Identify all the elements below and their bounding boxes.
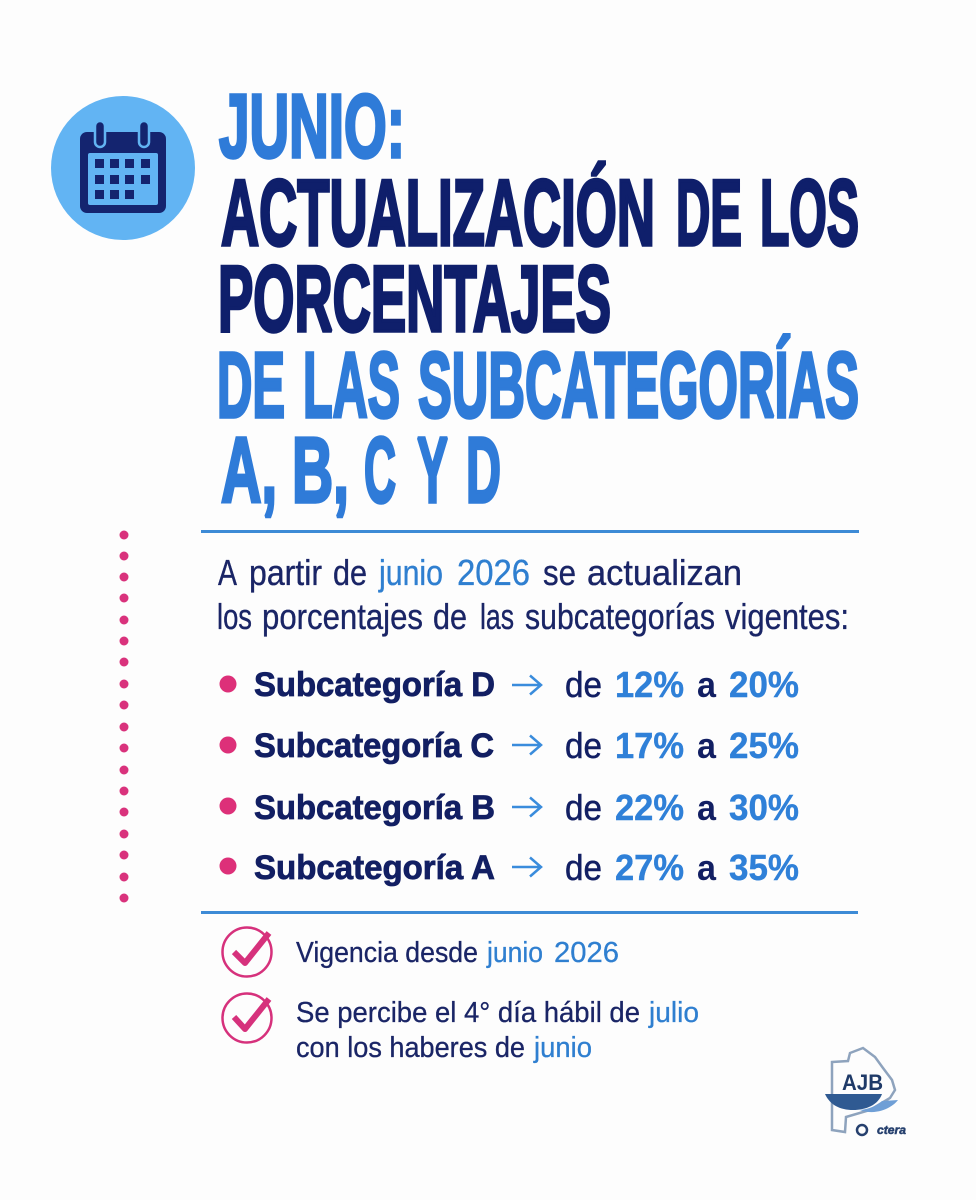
list row: subcategoría D: [220, 664, 799, 705]
list row: subcategoría B: a: [697, 787, 717, 828]
intro text: los: [217, 596, 252, 637]
logo: AJB: AJB: [842, 1070, 883, 1095]
list row: subcategoría B: 22%: [615, 787, 684, 828]
dotted vertical line: [120, 530, 128, 902]
intro text: vigentes:: [725, 596, 849, 637]
intro text: [217, 552, 849, 637]
intro text: de: [433, 596, 467, 637]
list row: subcategoría C: 25%: [729, 725, 799, 766]
intro text: actualizan: [587, 552, 742, 593]
list row: subcategoría C: de: [565, 725, 602, 766]
list row: subcategoría A: 27%: [615, 847, 684, 888]
list row: subcategoría A: a: [697, 847, 717, 888]
title: A,: [221, 418, 277, 522]
logo: AJB: ctera: [877, 1123, 906, 1137]
intro text: las: [480, 596, 514, 637]
title: LOS: [760, 160, 859, 265]
title: [217, 77, 859, 522]
title: PORCENTAJES: [218, 246, 611, 351]
note: percepción: julio: [648, 997, 699, 1029]
list row: subcategoría B: Subcategoría B: [254, 789, 495, 827]
intro text: partir: [249, 552, 322, 593]
divider top: [201, 530, 859, 533]
note: vigencia: [296, 937, 619, 969]
title: DE: [217, 333, 285, 437]
list row: subcategoría A: 35%: [729, 847, 799, 888]
title: C: [364, 418, 396, 522]
list row: subcategoría C: [220, 725, 799, 766]
title: B,: [292, 418, 349, 522]
note: percepción: [296, 997, 699, 1064]
list row: subcategoría D: 12%: [615, 664, 684, 705]
list row: subcategoría D: a: [697, 664, 717, 705]
list row: subcategoría A: [220, 847, 799, 888]
note: vigencia: Vigencia desde: [296, 937, 478, 969]
divider bottom: [201, 911, 858, 914]
icon: check 1: [222, 928, 272, 976]
list row: subcategoría D: de: [565, 664, 602, 705]
list row: subcategoría B: [220, 787, 799, 828]
intro text: de: [333, 552, 367, 593]
title: JUNIO:: [219, 77, 405, 177]
title: Y: [417, 418, 448, 522]
title: D: [466, 418, 501, 522]
intro text: se: [543, 552, 576, 593]
icon: calendar: [51, 96, 195, 240]
intro text: junio: [378, 552, 443, 593]
note: percepción: con los haberes de: [296, 1032, 525, 1064]
list row: subcategoría A: Subcategoría A: [254, 849, 495, 887]
intro text: A: [218, 552, 237, 593]
icon: check 2: [222, 994, 272, 1042]
list row: subcategoría D: Subcategoría D: [254, 666, 495, 704]
list row: subcategoría C: 17%: [615, 725, 684, 766]
intro text: 2026: [457, 552, 530, 593]
title: ACTUALIZACIÓN: [221, 160, 655, 265]
note: vigencia: 2026: [554, 937, 619, 969]
note: percepción: junio: [533, 1032, 592, 1064]
list row: subcategoría B: de: [565, 787, 602, 828]
list row: subcategoría D: 20%: [729, 664, 799, 705]
list row: subcategoría A: de: [565, 847, 602, 888]
note: percepción: Se percibe el 4° día hábil de: [296, 997, 640, 1029]
list row: subcategoría C: a: [697, 725, 717, 766]
list row: subcategoría C: Subcategoría C: [254, 727, 494, 765]
title: LAS: [303, 333, 400, 437]
logo: AJB: [825, 1048, 906, 1137]
intro text: subcategorías: [525, 596, 715, 637]
list row: subcategoría B: 30%: [729, 787, 799, 828]
intro text: porcentajes: [262, 596, 423, 637]
note: vigencia: junio: [486, 937, 543, 969]
title: DE: [676, 160, 742, 265]
